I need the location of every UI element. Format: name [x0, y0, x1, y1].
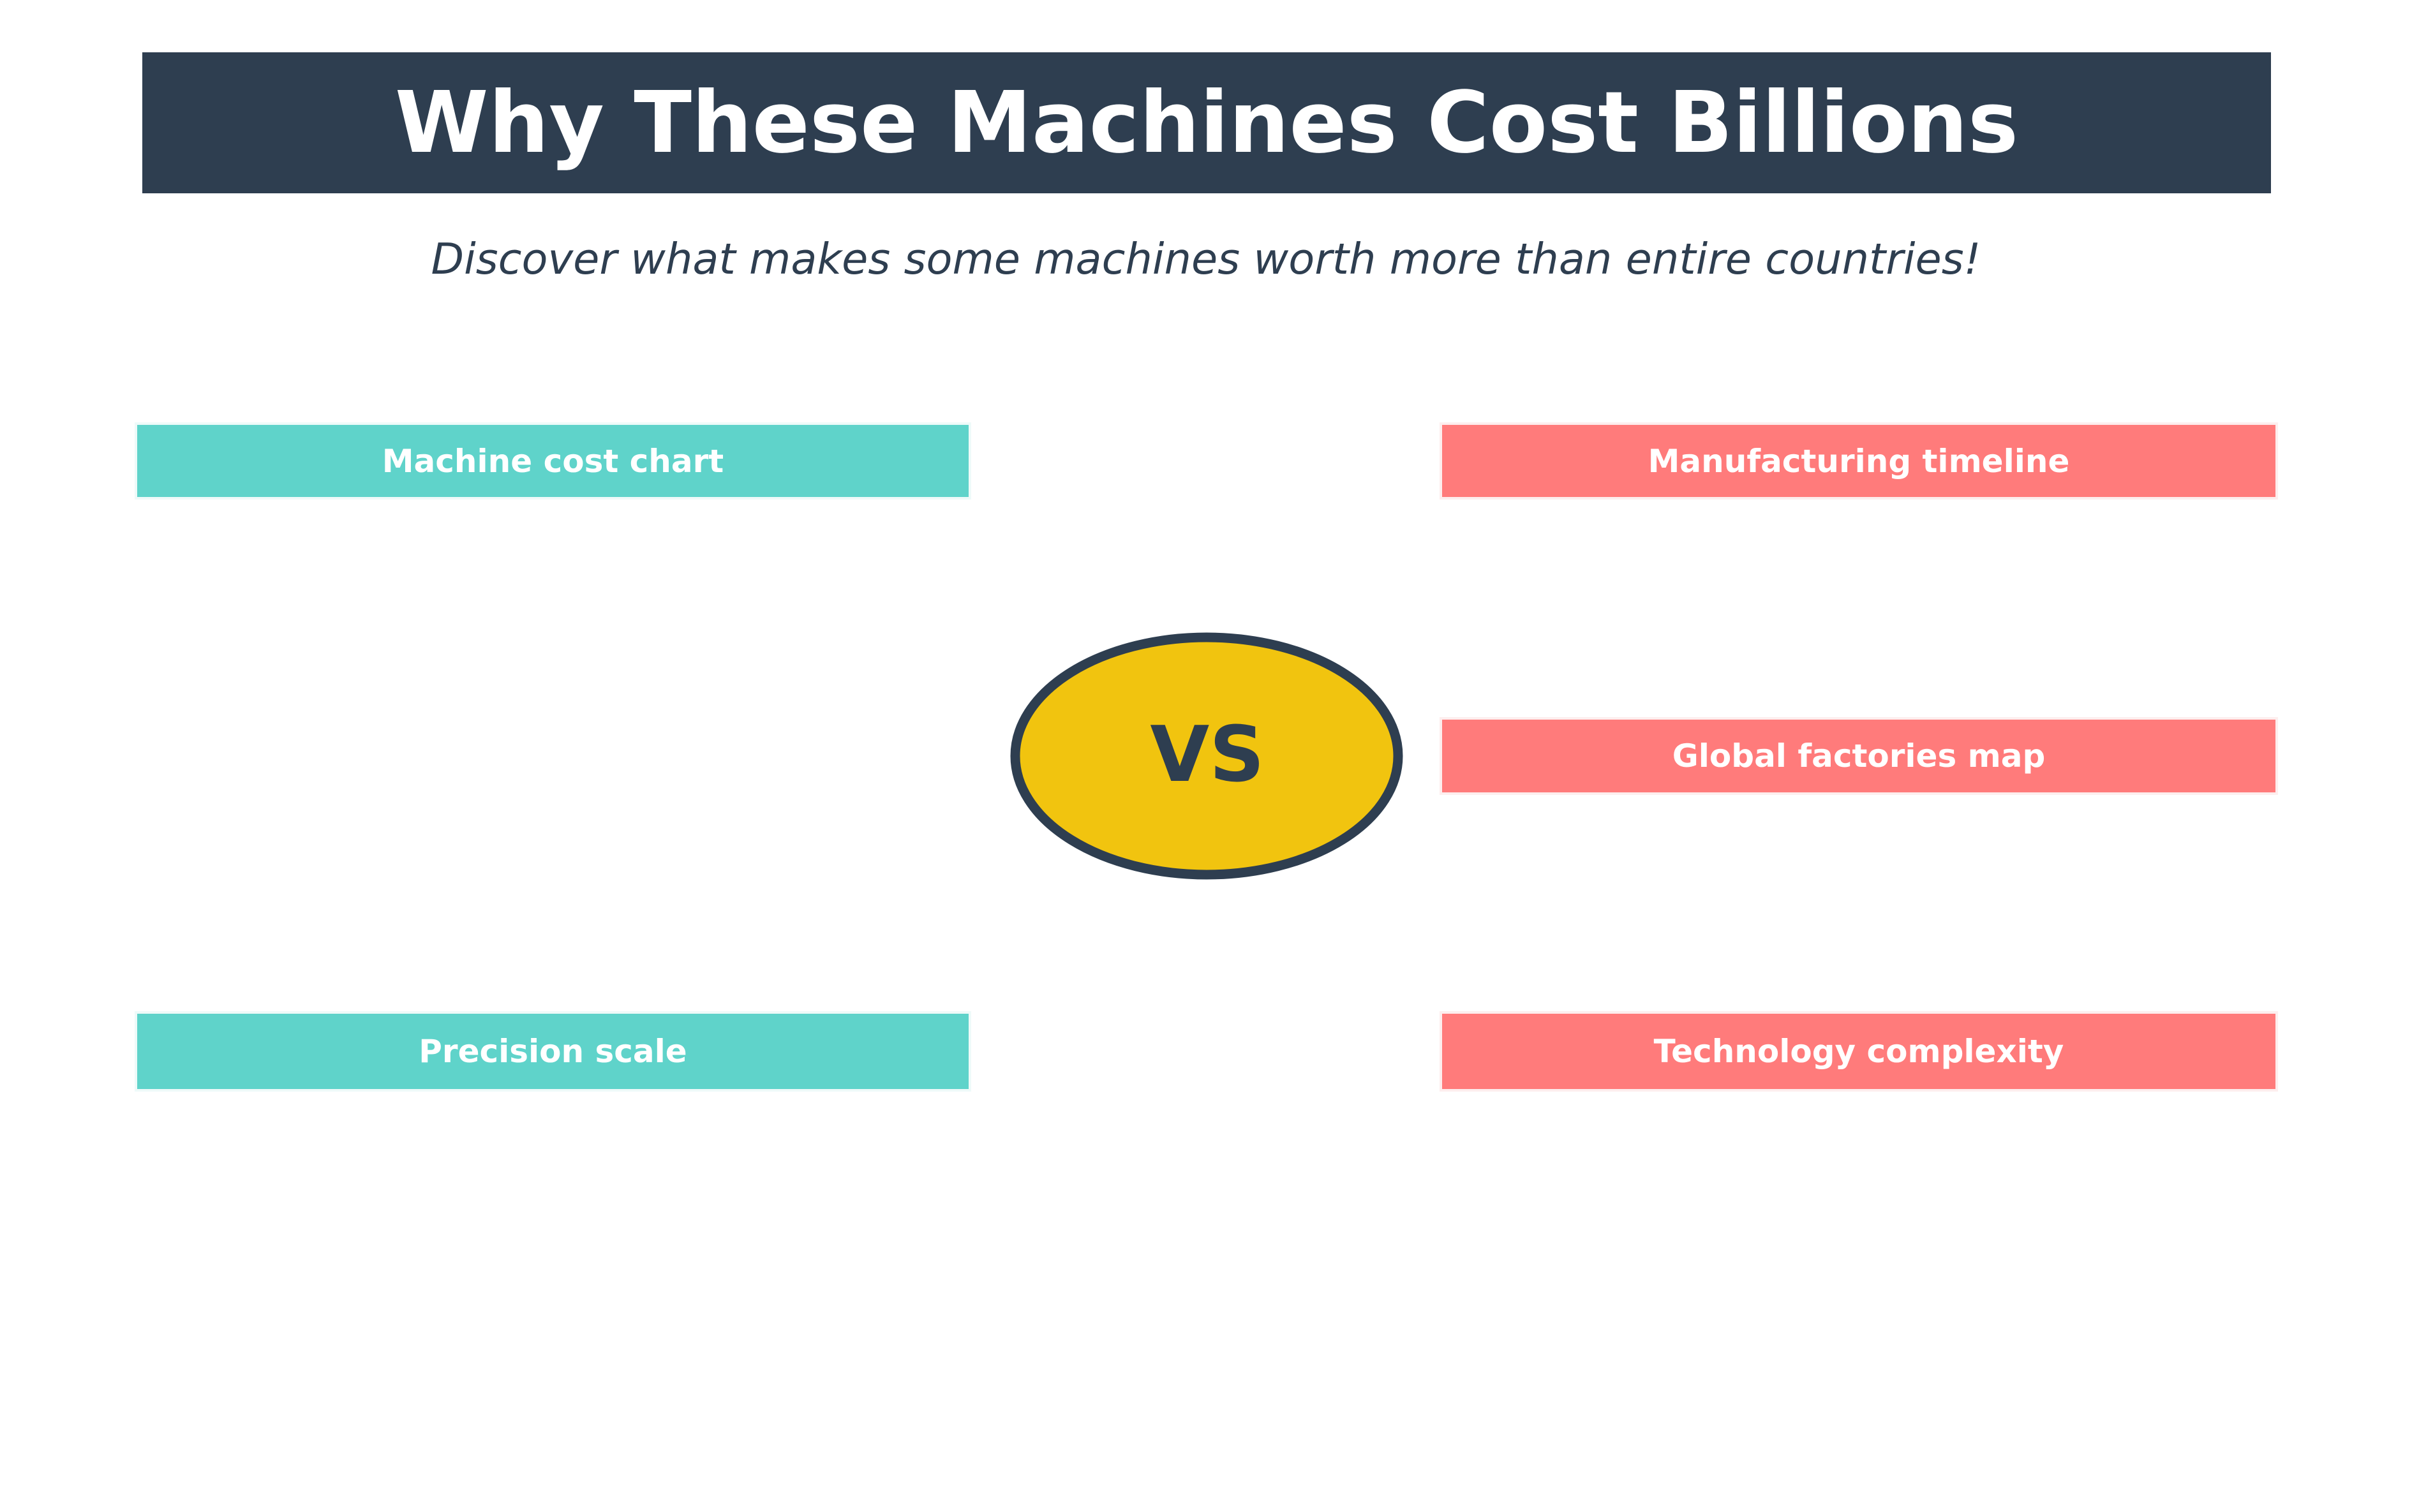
panel: global factories map	[1440, 717, 2278, 795]
panel: technology complexity	[1440, 1011, 2278, 1092]
panel: precision scale	[135, 1011, 971, 1092]
panel: machine cost chart: Machine cost chart	[382, 443, 724, 480]
panel: manufacturing timeline	[1440, 422, 2278, 500]
vs badge	[1011, 633, 1403, 879]
panel: precision scale: Precision scale	[419, 1033, 687, 1070]
title	[142, 52, 2271, 193]
subtitle: Discover what makes some machines worth more than entire countries!	[431, 234, 1981, 284]
title: Why These Machines Cost Billions	[395, 74, 2018, 172]
panel: technology complexity: Technology complexity	[1654, 1033, 2064, 1070]
panel: global factories map: Global factories map	[1672, 737, 2045, 775]
panel: manufacturing timeline: Manufacturing timeline	[1648, 443, 2069, 480]
panel: machine cost chart	[135, 422, 971, 500]
vs badge: VS	[1150, 711, 1265, 799]
